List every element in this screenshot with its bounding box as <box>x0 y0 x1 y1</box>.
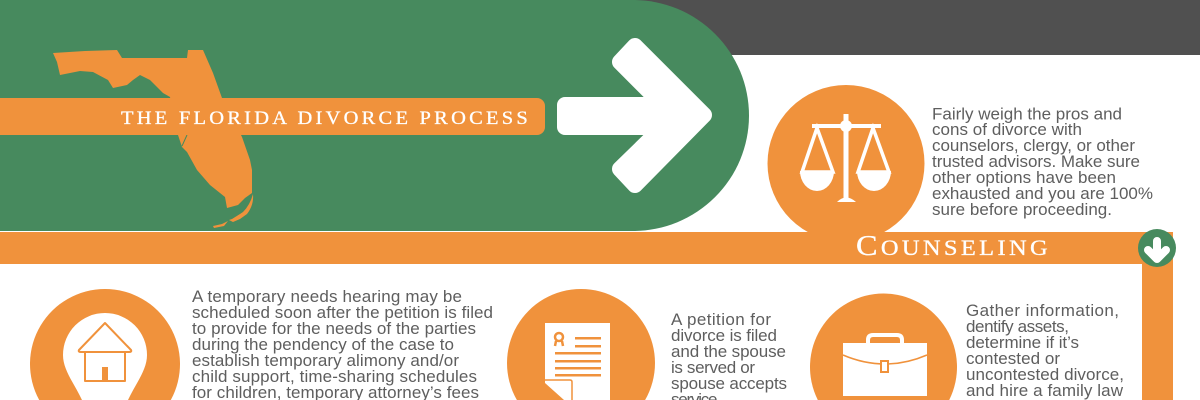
text: counseling description: exhausted and you are 100% <box>932 184 1153 203</box>
text: counseling description: sure before proceeding. <box>932 200 1112 219</box>
heading: Counseling: COUNSELING <box>856 230 1051 262</box>
text: gather information: uncontested divorce, <box>966 365 1124 384</box>
text: counseling description: counselors, clergy, or other <box>932 136 1135 155</box>
text: petition filed: spouse accepts <box>671 374 787 393</box>
text: temporary needs hearing: establish temporary alimony and/or <box>192 351 459 370</box>
title bar <box>0 98 545 135</box>
icon: briefcase <box>810 294 957 400</box>
text: counseling description: Fairly weigh the pros and <box>932 104 1122 124</box>
green header panel <box>0 0 749 231</box>
icon: house pin <box>30 289 180 400</box>
text: temporary needs hearing: A temporary needs hearing may be <box>192 287 462 306</box>
text: gather information: Gather information, <box>966 301 1119 320</box>
text: temporary needs hearing: child support, time-sharing schedules <box>192 367 477 386</box>
icon: down arrow badge <box>1138 229 1176 267</box>
text: gather information: dentify assets, <box>966 317 1069 336</box>
text: counseling description <box>932 104 1153 219</box>
text: petition filed: and the spouse <box>671 342 786 361</box>
counseling connector band <box>0 230 1173 400</box>
text: petition filed: is served or <box>671 358 755 377</box>
icon: Florida map <box>53 50 253 228</box>
text: temporary needs hearing: during the pendency of the case to <box>192 335 454 354</box>
text: counseling description: cons of divorce with <box>932 120 1082 139</box>
text: petition filed: A petition for <box>671 310 771 329</box>
text: gather information <box>966 301 1124 400</box>
text: gather information: contested or <box>966 349 1060 368</box>
icon: petition document <box>507 289 655 400</box>
text: petition filed: divorce is filed <box>671 326 777 345</box>
text: temporary needs hearing: scheduled soon after the petition is filed <box>192 303 493 322</box>
text: petition filed <box>671 310 787 400</box>
text: counseling description: trusted advisors. Make sure <box>932 152 1140 171</box>
text: temporary needs hearing: to provide for the needs of the parties <box>192 319 476 338</box>
text: gather information: and hire a family law <box>966 381 1124 400</box>
title: THE FLORIDA DIVORCE PROCESS <box>121 108 531 129</box>
icon: scales of justice <box>768 85 924 242</box>
text: temporary needs hearing <box>192 287 493 400</box>
text: counseling description: other options have been <box>932 168 1116 187</box>
arrow: right <box>565 46 704 185</box>
dark header band <box>600 0 1200 55</box>
text: gather information: determine if it’s <box>966 333 1079 352</box>
